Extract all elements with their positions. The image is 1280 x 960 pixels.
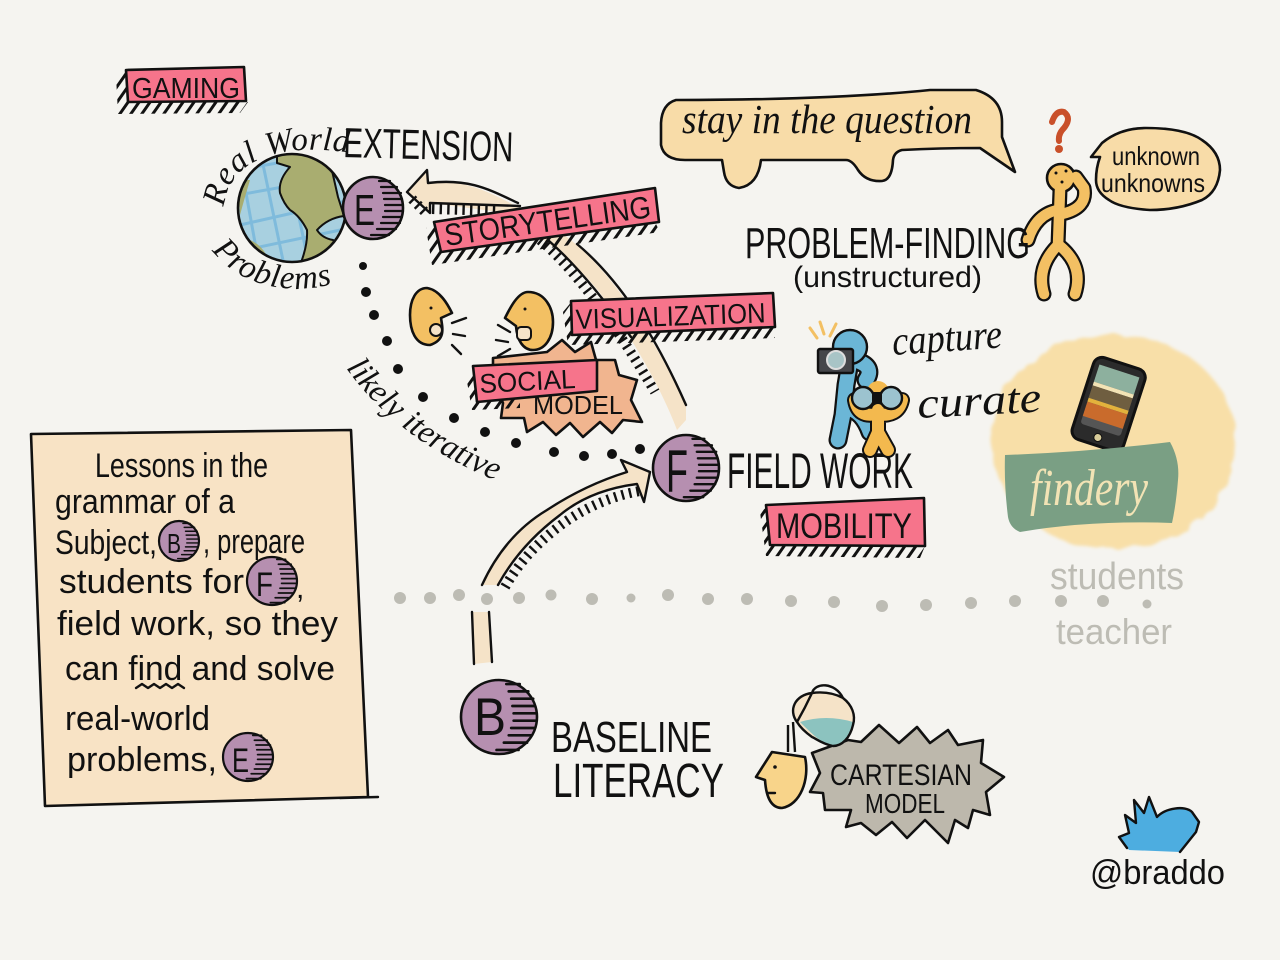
circle: F [653,435,719,505]
lesson text [55,447,338,779]
label: baseline literacy: BASELINE [551,713,712,762]
inline circle: E: E [232,742,249,780]
tag: gaming: GAMING [132,73,240,105]
circle: F: F [666,438,688,505]
lesson text: real-world [65,700,210,738]
panel: lessons [31,430,378,806]
bubble: unknown unknowns: unknown [1112,141,1200,171]
circle: B: B [474,688,506,747]
inline circle: B: B [167,528,181,559]
label: problem-finding [745,219,1030,294]
lesson text: , prepare [203,523,305,561]
burst: cartesian model: MODEL [865,788,945,819]
credit: @braddo: @braddo [1090,854,1225,892]
tag: social [466,360,597,410]
label: likely iterative: likely iterative [347,357,500,478]
inline circle: E [223,733,273,781]
tag: mobility: MOBILITY [776,507,912,546]
banner: findery [1005,442,1178,532]
face: listener [410,288,466,354]
label: capture: capture [890,310,1003,364]
tag: visualization [563,293,775,345]
icon: globe [238,150,350,270]
lesson text: can find and solve [65,650,335,688]
lesson text: , [296,572,304,605]
label: field work: FIELD WORK [727,443,913,499]
bubble: unknown unknowns [1091,128,1220,210]
title: real world extension: EXTENSION [343,119,514,170]
tag: social: SOCIAL [479,364,576,399]
icon: twitter bird [1119,797,1199,852]
curved label: problems: Problems [211,238,330,290]
burst: social model: MODEL [533,390,623,420]
dotted path: likely iterative loop [359,262,645,461]
icon: question mark [1052,112,1068,153]
tag: visualization: VISUALIZATION [575,297,766,335]
circle: E [343,177,403,239]
circle: E: E [354,186,375,235]
label: problem-finding: (unstructured) [793,261,982,294]
speech bubble: stay in the question: stay in the question [682,96,972,142]
lesson text: Lessons in the [95,447,268,485]
tag: gaming [116,67,248,114]
burst: cartesian model [810,725,1004,843]
inline circle: F: F [256,566,273,604]
arrow: field work to extension [407,170,686,430]
tag: storytelling: STORYTELLING [442,189,653,253]
lesson text: Subject, [55,524,157,562]
tag: mobility [760,498,925,558]
inline circle: B [159,521,199,561]
label: teacher: teacher [1056,611,1172,652]
figure: blue person with camera [810,322,870,440]
face: speaker [496,292,553,356]
icon: phone [1070,355,1148,453]
label: baseline literacy [551,713,724,808]
burst: social model [493,340,642,437]
circle: B [461,680,537,754]
label: curate: curate [916,375,1042,428]
blob: findery background [992,334,1236,550]
arrow: baseline to field work [472,460,650,664]
figure: gold person with binoculars [852,381,902,450]
burst: cartesian model: CARTESIAN [830,759,972,792]
divider: students teacher dotted line [394,589,1152,612]
figure: puzzled person [1028,164,1085,294]
label: problem-finding: PROBLEM-FINDING [745,219,1030,268]
inline circle: F [247,557,297,605]
curved label: real world: Real World [203,127,350,207]
lesson text: grammar of a [55,483,235,521]
icon: jug pouring into head [756,685,854,808]
lesson text: field work, so they [57,605,338,643]
lesson text: students for [59,563,244,601]
lesson text: problems, [67,741,217,779]
label: baseline literacy: LITERACY [553,755,724,808]
bubble: unknown unknowns: unknowns [1101,168,1205,198]
speech bubble: stay in the question [661,90,1015,188]
banner: findery: findery [1030,460,1149,517]
label: students: students [1050,556,1184,598]
